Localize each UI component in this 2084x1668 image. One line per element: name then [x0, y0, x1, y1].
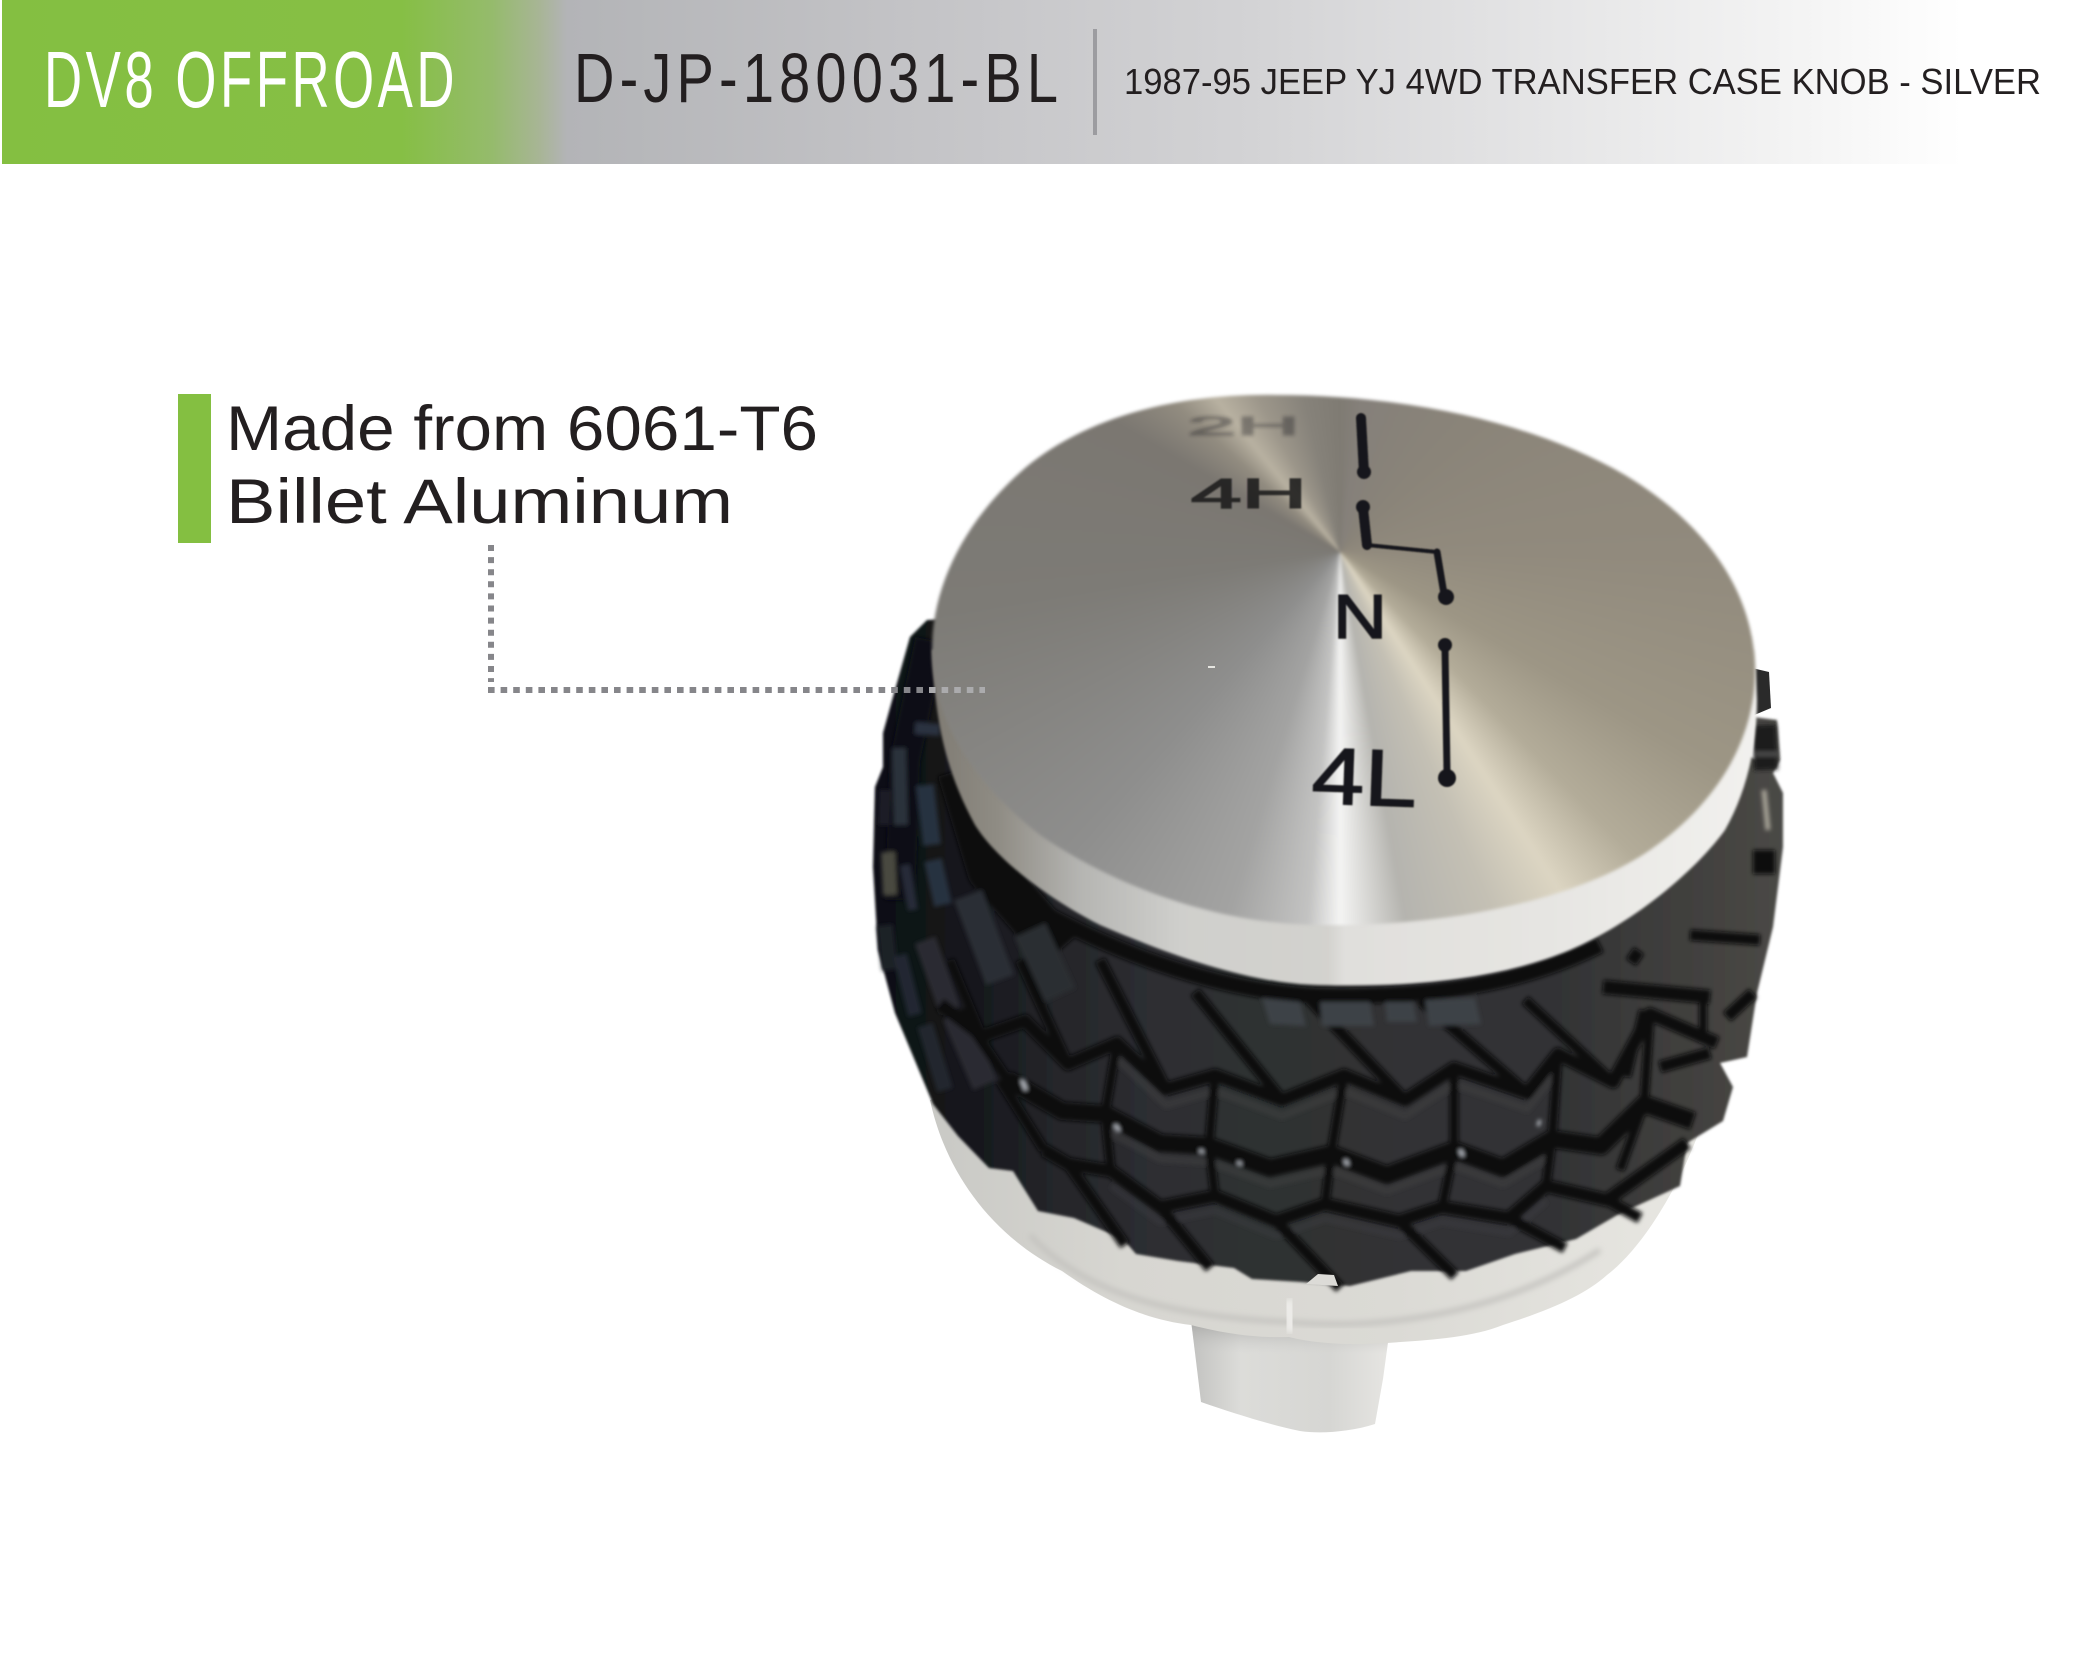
- stem: [1191, 1320, 1389, 1432]
- top right block: [1764, 725, 1766, 770]
- right side grooves: [1603, 987, 1710, 997]
- product title: 1987-95 JEEP YJ 4WD TRANSFER CASE KNOB - SILVER: [1124, 61, 2041, 102]
- header divider: [1093, 29, 1097, 135]
- brushed metal top face: [930, 392, 1758, 926]
- zigzag grooves: [940, 1004, 1717, 1100]
- callout accent bar: [178, 394, 211, 543]
- callout text: Billet Aluminum: [226, 467, 733, 537]
- part number: D-JP-180031-BL: [574, 40, 1058, 117]
- header band: [2, 0, 2084, 164]
- callout text: Made from 6061-T6: [226, 394, 818, 464]
- bright base sliver under tread: [1306, 1274, 1338, 1286]
- rim-side block heads: [1262, 998, 1481, 1026]
- lower aluminum base: [930, 1000, 1705, 1344]
- small stub behind face: [1752, 668, 1771, 716]
- brand name: DV8 OFFROAD: [44, 36, 455, 125]
- wet glints: [1022, 1080, 1540, 1165]
- dark left shoulder: [900, 640, 930, 900]
- chevron separators: [1105, 1014, 1650, 1154]
- groove bevel highlights: [1117, 1059, 1558, 1116]
- lower bar grooves: [1068, 1164, 1640, 1288]
- tire silhouette: [873, 600, 1783, 1286]
- callout dotted leader line: [488, 545, 985, 693]
- product illustration: transfer case knob: [871, 392, 1785, 1432]
- shadow under rim: [1030, 905, 1600, 996]
- diagonal bar grooves: [950, 960, 982, 1036]
- tire tread grooves and blocks: [884, 640, 1778, 1288]
- label: N: N: [1333, 583, 1387, 652]
- face side rim: [932, 520, 1757, 985]
- left narrow blocks: [884, 728, 1060, 1090]
- label: 4H: 4H: [1191, 470, 1307, 517]
- shift gate lines: [1361, 418, 1447, 772]
- callout text: [226, 394, 818, 537]
- label: 4L: 4L: [1310, 731, 1418, 824]
- label: 2H: 2H: [1187, 411, 1300, 441]
